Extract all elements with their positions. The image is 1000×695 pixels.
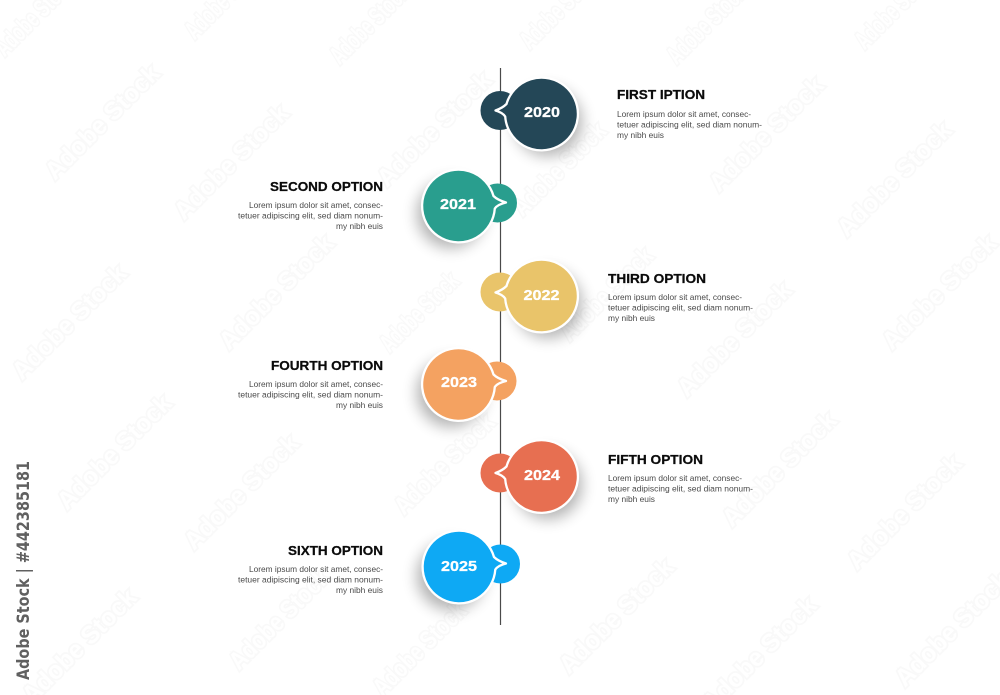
text: first option: Lorem ipsum dolor sit amet, consec- (617, 109, 751, 119)
text: fifth option: tetuer adipiscing elit, sed diam nonum- (608, 484, 753, 494)
background watermark: Adobe Stock (554, 242, 659, 347)
milestone 2020: 2020 (524, 105, 560, 121)
background watermark: Adobe Stock (223, 563, 335, 675)
background watermark: Adobe Stock (371, 66, 497, 192)
text: first option (617, 87, 762, 140)
background watermark: Adobe Stock (213, 229, 339, 355)
background watermark: Adobe Stock (831, 116, 957, 242)
text: third option: tetuer adipiscing elit, sed diam nonum- (608, 302, 753, 312)
milestone 2025 (417, 531, 520, 610)
background watermark: Adobe Stock (39, 59, 165, 185)
milestone 2021 (417, 170, 517, 248)
text: sixth option: SIXTH OPTION (288, 543, 383, 558)
milestone 2025: 2025 (441, 559, 477, 575)
text: second option: my nibh euis (336, 221, 383, 231)
milestone 2022: 2022 (524, 288, 560, 304)
background watermark: Adobe Stock (374, 267, 465, 358)
text: fifth option (608, 452, 753, 504)
background watermark: Adobe Stock (51, 389, 177, 515)
text: second option: tetuer adipiscing elit, sed diam nonum- (238, 210, 383, 220)
background watermark: Adobe Stock (703, 71, 829, 197)
text: fifth option: my nibh euis (608, 494, 655, 504)
milestone 2024 (480, 440, 582, 519)
milestone 2024: 2024 (524, 468, 560, 484)
text: first option: my nibh euis (617, 130, 664, 140)
milestone 2022 (480, 260, 582, 338)
milestone 2023: 2023 (441, 375, 477, 391)
background watermark: Adobe Stock (671, 276, 797, 402)
timeline vertical line (500, 68, 502, 625)
text: fifth option: Lorem ipsum dolor sit amet, consec- (608, 473, 742, 483)
text: fourth option: Lorem ipsum dolor sit amet, consec- (249, 379, 383, 389)
text: fourth option: my nibh euis (336, 400, 383, 410)
milestone 2020 (480, 78, 582, 156)
background watermark: Adobe Stock (716, 406, 842, 532)
text: sixth option (238, 543, 383, 595)
text: first option: FIRST IPTION (617, 87, 705, 102)
text: sixth option: tetuer adipiscing elit, sed diam nonum- (238, 574, 383, 584)
text: fourth option: FOURTH OPTION (271, 358, 383, 373)
background watermark: Adobe Stock (553, 553, 679, 679)
text: third option: THIRD OPTION (608, 271, 706, 286)
text: second option (238, 179, 383, 231)
background watermark: Adobe Stock (388, 408, 500, 520)
text: first option: tetuer adipiscing elit, sed diam nonum- (617, 120, 762, 130)
background watermark: Adobe Stock (841, 449, 967, 575)
text: third option: my nibh euis (608, 313, 655, 323)
text: fourth option (238, 358, 383, 410)
background watermark: Adobe Stock (178, 429, 304, 555)
stock id label: Adobe Stock | #442385181 (14, 461, 34, 680)
text: second option: SECOND OPTION (270, 179, 383, 194)
text: sixth option: my nibh euis (336, 585, 383, 595)
milestone 2021: 2021 (440, 197, 476, 213)
background watermark: Adobe Stock (168, 99, 294, 225)
text: sixth option: Lorem ipsum dolor sit amet, consec- (249, 564, 383, 574)
background watermark: Adobe Stock (6, 259, 132, 385)
milestone 2023 (417, 348, 516, 427)
background watermark: Adobe Stock (507, 117, 612, 222)
text: fourth option: tetuer adipiscing elit, sed diam nonum- (238, 390, 383, 400)
text: third option (608, 271, 753, 323)
text: second option: Lorem ipsum dolor sit amet, consec- (249, 200, 383, 210)
text: fifth option: FIFTH OPTION (608, 452, 703, 467)
text: third option: Lorem ipsum dolor sit amet, consec- (608, 292, 742, 302)
